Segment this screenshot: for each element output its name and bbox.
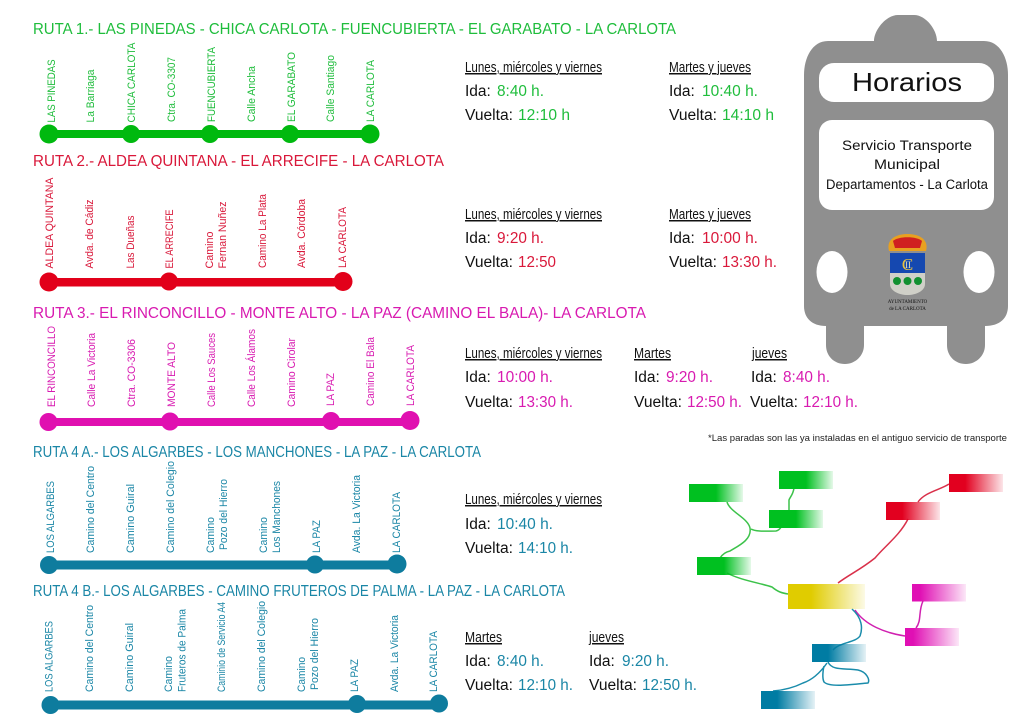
schedule: ruta 1 lunes: Ida: — [465, 83, 491, 100]
icon: coat of arms: II — [905, 260, 911, 270]
icon: coat of arms — [888, 234, 928, 312]
schedule: ruta 4A lunes: 14:10 h. — [518, 540, 573, 557]
schedule: ruta 3 lunes: Vuelta: — [465, 394, 513, 411]
node: teal 1 — [812, 644, 866, 662]
schedule: ruta 2 lunes: 9:20 h. — [497, 230, 544, 247]
stop labels: ruta 1: LA CARLOTA — [365, 60, 377, 122]
stop labels: ruta 4A: LA CARLOTA — [391, 492, 403, 553]
bus body — [804, 15, 1008, 364]
stop labels: ruta 4A — [45, 461, 403, 553]
stop labels: ruta 2: LA CARLOTA — [337, 207, 349, 268]
stop labels: ruta 2: Avda. Córdoba — [296, 198, 308, 268]
schedule: ruta 2 lunes: Lunes, miércoles y viernes — [465, 206, 602, 223]
stop labels: ruta 3: Ctra. CO-3306 — [126, 339, 138, 407]
subtitle window: Departamentos - La Carlota — [826, 177, 988, 192]
stop labels: ruta 4A: Camino del Centro — [85, 466, 97, 553]
schedule: ruta 1 lunes: Lunes, miércoles y viernes — [465, 59, 602, 76]
stop labels: ruta 4B: Camino — [296, 657, 308, 692]
stop labels: ruta 2: Avda. de Cádiz — [84, 199, 96, 268]
route line: ruta 3 — [40, 411, 420, 431]
schedule: ruta 4B martes: Ida: — [465, 653, 491, 670]
stop labels: ruta 4B: Camino — [163, 656, 175, 692]
schedule: ruta 2 martes y jueves: Vuelta: — [669, 254, 717, 271]
heading: ruta 4B: RUTA 4 B.- LOS ALGARBES - CAMINO FRUTEROS DE PALMA - LA PAZ - LA CARLOTA — [33, 583, 565, 600]
schedule: ruta 3 lunes: Ida: — [465, 369, 491, 386]
schedule: ruta 1 martes y jueves: 10:40 h. — [702, 83, 758, 100]
schedule: ruta 1 martes y jueves: Vuelta: — [669, 107, 717, 124]
schedule: ruta 1 lunes: 8:40 h. — [497, 83, 544, 100]
connectors: green — [720, 488, 794, 594]
subtitle window: Municipal — [874, 157, 940, 172]
stop labels: ruta 4B: LOS ALGARBES — [44, 621, 56, 692]
stop labels: ruta 4B: Camino Guiral — [124, 623, 136, 692]
stop labels: ruta 3 — [46, 326, 417, 407]
node: teal 2 — [761, 691, 815, 709]
stop labels: ruta 4A: Camino Guiral — [125, 484, 137, 553]
schedule: ruta 2 lunes: Vuelta: — [465, 254, 513, 271]
schedule: ruta 1 lunes — [465, 59, 602, 124]
schedule: ruta 4A lunes: Lunes, miércoles y viernes — [465, 491, 602, 508]
node: green 2 — [779, 471, 833, 489]
stop labels: ruta 4A: Camino — [258, 517, 270, 553]
stop labels: ruta 1: FUENCUBIERTA — [206, 47, 218, 122]
stop labels: ruta 4B: Camino del Centro — [84, 605, 96, 692]
connectors: magenta — [855, 601, 923, 636]
headlight right — [964, 251, 994, 293]
heading: ruta 1: RUTA 1.- LAS PINEDAS - CHICA CARLOTA - FUENCUBIERTA - EL GARABATO - LA CARLOTA — [33, 21, 676, 38]
stop labels: ruta 1: La Barriaga — [85, 69, 97, 122]
stop labels: ruta 4A: Los Manchones — [271, 481, 283, 553]
icon: bus with title — [804, 15, 1008, 364]
icon: coat of arms: AYUNTAMIENTO — [888, 300, 928, 305]
connectors: red — [838, 484, 949, 583]
panel: ruta 1 — [33, 21, 774, 144]
schedule: ruta 2 martes y jueves: Ida: — [669, 230, 695, 247]
stop labels: ruta 4B: Caminio de Servicio A4 — [216, 602, 228, 692]
panel: ruta 3 — [33, 305, 858, 431]
stop labels: ruta 4B — [44, 601, 440, 692]
stop labels: ruta 3: LA CARLOTA — [405, 345, 417, 406]
stop labels: ruta 3: Calle Los Álamos — [245, 329, 258, 407]
schedule: ruta 4A lunes: Ida: — [465, 516, 491, 533]
node: green 4 — [697, 557, 751, 575]
stop labels: ruta 1: EL GARABATO — [286, 52, 298, 122]
connectors: teal — [773, 609, 869, 691]
stop labels: ruta 1 — [46, 42, 377, 122]
schedule: ruta 3 lunes: Lunes, miércoles y viernes — [465, 345, 602, 362]
panel: ruta 4A — [33, 444, 602, 574]
stop labels: ruta 2: ALDEA QUINTANA — [44, 177, 56, 268]
schedule: ruta 4B martes: 12:10 h. — [518, 677, 573, 694]
schedule: ruta 4B martes — [465, 629, 573, 694]
stop labels: ruta 2: Las Dueñas — [125, 215, 137, 268]
schedule: ruta 3 martes — [634, 345, 742, 411]
schedule: ruta 3 martes: Martes — [634, 345, 671, 362]
node: green 1 — [689, 484, 743, 502]
schedule: ruta 2 martes y jueves — [669, 206, 777, 271]
schedule: ruta 2 martes y jueves: Martes y jueves — [669, 206, 751, 223]
node: yellow centre — [788, 584, 865, 609]
stop labels: ruta 2: Fernan Nuñez — [217, 201, 229, 268]
schedule: ruta 3 jueves: Ida: — [751, 369, 777, 386]
schedule: ruta 1 lunes: 12:10 h — [518, 107, 570, 124]
schedule: ruta 3 lunes: 10:00 h. — [497, 369, 553, 386]
heading: ruta 2: RUTA 2.- ALDEA QUINTANA - EL ARRECIFE - LA CARLOTA — [33, 153, 444, 170]
stop labels: ruta 2: EL ARRECIFE — [164, 210, 176, 268]
schedule: ruta 4B jueves: Ida: — [589, 653, 615, 670]
panel: ruta 4B — [33, 583, 697, 714]
subtitle window — [819, 120, 994, 210]
stop labels: ruta 4B: Camino del Colegio — [256, 601, 268, 692]
stop labels: ruta 3: Calle La Victoria — [86, 332, 98, 407]
schedule: ruta 3 jueves: jueves — [751, 345, 787, 362]
stop labels: ruta 4A: LOS ALGARBES — [45, 481, 57, 553]
stop labels: ruta 4B: Avda. La Victoria — [389, 614, 401, 692]
node: magenta 2 — [905, 628, 959, 646]
route line: ruta 4B — [42, 694, 448, 714]
stop labels: ruta 4A: Camino — [205, 517, 217, 553]
stop labels: ruta 3: Calle Los Sauces — [206, 333, 218, 407]
node: green 3 — [769, 510, 823, 528]
node: magenta 1 — [912, 584, 966, 602]
schedule: ruta 1 lunes: Vuelta: — [465, 107, 513, 124]
schedule: ruta 2 lunes: 12:50 — [518, 254, 556, 271]
stop labels: ruta 3: MONTE ALTO — [166, 342, 178, 407]
stop labels: ruta 3: LA PAZ — [325, 373, 337, 406]
stop labels: ruta 4A: Avda. La Victoria — [351, 474, 363, 553]
schedule: ruta 3 martes: Vuelta: — [634, 394, 682, 411]
schedule: ruta 3 martes: 12:50 h. — [687, 394, 742, 411]
stop labels: ruta 4B: Fruteros de Palma — [176, 608, 188, 692]
stop labels: ruta 1: Ctra. CO-3307 — [166, 57, 178, 122]
footnote: *Las paradas son las ya instaladas en el antiguo servicio de transporte — [708, 433, 1007, 444]
stop labels: ruta 4B: Pozo del Hierro — [309, 618, 321, 690]
schedule: ruta 2 lunes — [465, 206, 602, 271]
panel: ruta 2 — [33, 153, 777, 292]
node: red 2 — [886, 502, 940, 520]
schedule: ruta 2 martes y jueves: 13:30 h. — [722, 254, 777, 271]
schedule: ruta 4B martes: 8:40 h. — [497, 653, 544, 670]
route line: ruta 1 — [40, 124, 380, 144]
node: red 1 — [949, 474, 1003, 492]
schedule: ruta 3 martes: Ida: — [634, 369, 660, 386]
heading: ruta 4A: RUTA 4 A.- LOS ALGARBES - LOS MANCHONES - LA PAZ - LA CARLOTA — [33, 444, 481, 461]
stop labels: ruta 4A: Camino del Colegio — [165, 461, 177, 553]
schedule: ruta 4B jueves: Vuelta: — [589, 677, 637, 694]
stop labels: ruta 4A: LA PAZ — [311, 520, 323, 553]
stop labels: ruta 1: LAS PINEDAS — [46, 60, 58, 122]
subtitle window: Servicio Transporte — [842, 138, 972, 153]
schedule: ruta 2 martes y jueves: 10:00 h. — [702, 230, 758, 247]
stop labels: ruta 1: CHICA CARLOTA — [126, 42, 138, 122]
stop labels: ruta 4A: Pozo del Hierro — [218, 479, 230, 550]
stop labels: ruta 2: Camino — [204, 232, 216, 268]
stop labels: ruta 2: Camino La Plata — [257, 193, 269, 268]
title window: Horarios — [852, 67, 962, 97]
schedule: ruta 4B jueves: 12:50 h. — [642, 677, 697, 694]
schedule: ruta 4B jueves — [588, 629, 697, 694]
stop labels: ruta 3: Camino El Bala — [365, 336, 377, 406]
schedule: ruta 3 jueves — [750, 345, 858, 411]
heading: ruta 3: RUTA 3.- EL RINCONCILLO - MONTE ALTO - LA PAZ (CAMINO EL BALA)- LA CARLOTA — [33, 305, 646, 322]
schedule: ruta 1 martes y jueves: Ida: — [669, 83, 695, 100]
stop labels: ruta 4B: LA PAZ — [349, 659, 361, 692]
schedule: ruta 4B jueves: jueves — [588, 629, 624, 646]
title window — [819, 63, 994, 102]
stop labels: ruta 3: EL RINCONCILLO — [46, 326, 58, 407]
stop labels: ruta 3: Camino Cirolar — [286, 338, 298, 407]
schedule: ruta 4A lunes — [465, 491, 602, 557]
schedule: ruta 3 lunes — [465, 345, 602, 411]
stop labels: ruta 1: Calle Ancha — [246, 65, 258, 122]
schedule: ruta 4B martes: Martes — [465, 629, 502, 646]
headlight left — [816, 251, 848, 293]
schedule: ruta 1 martes y jueves — [669, 59, 774, 124]
schedule: ruta 2 lunes: Ida: — [465, 230, 491, 247]
icon: coat of arms: de LA CARLOTA — [889, 307, 926, 312]
schedule: ruta 4A lunes: 10:40 h. — [497, 516, 553, 533]
diagram: route map — [689, 471, 1003, 709]
schedule: ruta 1 martes y jueves: 14:10 h — [722, 107, 774, 124]
schedule: ruta 3 jueves: 12:10 h. — [803, 394, 858, 411]
schedule: ruta 4A lunes: Vuelta: — [465, 540, 513, 557]
stop labels: ruta 2 — [44, 177, 349, 268]
schedule: ruta 3 jueves: Vuelta: — [750, 394, 798, 411]
schedule: ruta 4B martes: Vuelta: — [465, 677, 513, 694]
route line: ruta 2 — [40, 272, 352, 292]
schedule: ruta 3 lunes: 13:30 h. — [518, 394, 573, 411]
schedule: ruta 3 martes: 9:20 h. — [666, 369, 713, 386]
icon: coat of arms: C — [902, 255, 913, 274]
stop labels: ruta 1: Calle Santiago — [325, 55, 337, 122]
route line: ruta 4A — [40, 554, 406, 574]
schedule: ruta 3 jueves: 8:40 h. — [783, 369, 830, 386]
schedule: ruta 4B jueves: 9:20 h. — [622, 653, 669, 670]
schedule: ruta 1 martes y jueves: Martes y jueves — [669, 59, 751, 76]
stop labels: ruta 4B: LA CARLOTA — [428, 631, 440, 692]
